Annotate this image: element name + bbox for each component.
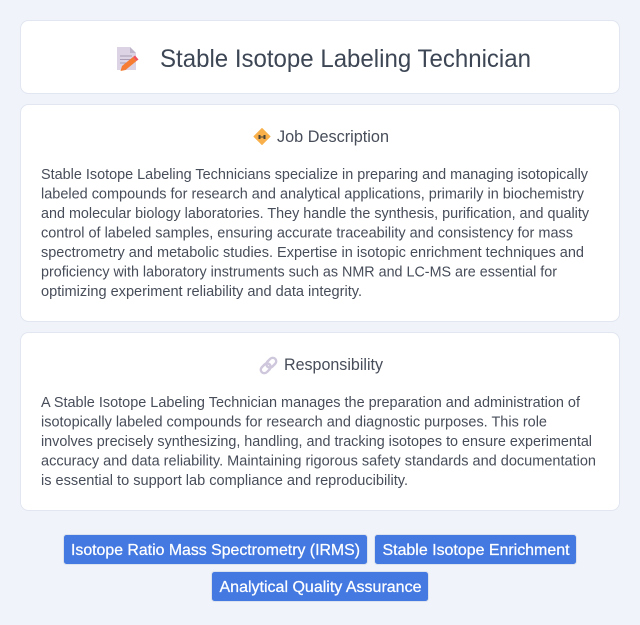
job description text: and molecular biology laboratories. They handle the synthesis, purification, and quality bbox=[41, 206, 590, 222]
responsibility text: isotopically labeled compounds for research and diagnostic purposes. This role bbox=[41, 414, 547, 430]
responsibility text: accuracy and data reliability. Maintaining rigorous safety standards and documentation bbox=[41, 454, 596, 470]
tag: isotope ratio mass spectrometry: Isotope Ratio Mass Spectrometry (IRMS) bbox=[71, 542, 360, 559]
tag: stable isotope enrichment: Stable Isotope Enrichment bbox=[382, 542, 570, 559]
responsibility text: involves precisely synthesizing, handling, and tracking isotopes to ensure experimental bbox=[41, 434, 592, 450]
job description text bbox=[41, 167, 590, 300]
responsibility text: is essential to support lab compliance and reproducibility. bbox=[41, 473, 408, 489]
tag: analytical quality assurance bbox=[212, 572, 428, 602]
icon: orange diamond bbox=[254, 128, 270, 144]
heading: responsibility: Responsibility bbox=[284, 356, 384, 374]
icon: document with pencil bbox=[117, 47, 138, 71]
icon: chain link bbox=[259, 356, 278, 375]
job description text: labeled compounds for research and analytical applications, primarily in biochemistry bbox=[41, 186, 585, 202]
job description text: control of labeled samples, ensuring accurate traceability and consistency for mass bbox=[41, 226, 573, 242]
tag: stable isotope enrichment bbox=[374, 534, 576, 564]
panel: title bbox=[20, 20, 620, 94]
tag: analytical quality assurance: Analytical Quality Assurance bbox=[220, 579, 422, 596]
tag: isotope ratio mass spectrometry bbox=[64, 534, 368, 564]
panel: job description bbox=[20, 104, 620, 322]
job description text: optimizing experiment reliability and data integrity. bbox=[41, 284, 362, 300]
job description text: spectrometry and metabolic studies. Expertise in isotopic enrichment techniques and bbox=[41, 245, 584, 261]
job description text: Stable Isotope Labeling Technicians specialize in preparing and managing isotopically bbox=[41, 167, 589, 183]
responsibility text bbox=[41, 395, 596, 489]
responsibility text: A Stable Isotope Labeling Technician manages the preparation and administration of bbox=[41, 395, 581, 411]
heading: job description: Job Description bbox=[277, 128, 389, 146]
panel: responsibility bbox=[20, 332, 620, 510]
job description text: proficiency with laboratory instruments such as NMR and LC-MS are essential for bbox=[41, 264, 557, 280]
title text: Stable Isotope Labeling Technician bbox=[160, 45, 531, 73]
